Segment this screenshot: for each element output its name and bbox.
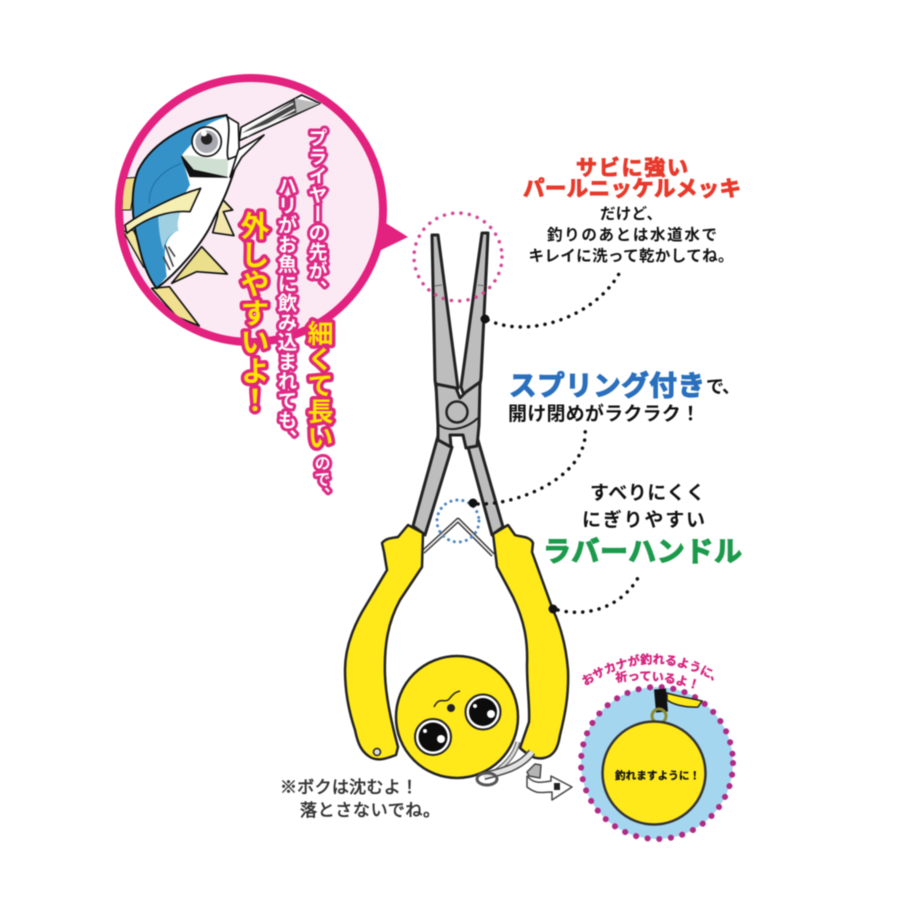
emphasis: thin and long: 細くて長い [304, 320, 334, 450]
left arm [413, 436, 452, 535]
handle heading: ラバーハンドル [543, 536, 742, 567]
note: wash and dry after fishing [528, 205, 734, 265]
emphasis: easy to remove: 外しやすいよ！ [236, 211, 270, 414]
jaw tip lines [434, 285, 485, 286]
bubble circle and pointer [119, 78, 408, 342]
caption line 1: おサカナが釣れるように、 [582, 652, 714, 686]
back message: 釣れますように！ [615, 769, 700, 782]
line 1: プライヤーの先が、 [306, 128, 327, 299]
nose [448, 704, 454, 712]
right eye [466, 694, 500, 730]
handle note 1: すべりにくく [590, 482, 705, 504]
blue back [133, 115, 227, 288]
note line 3: キレイに洗って乾かしてね。 [528, 246, 734, 265]
note: mascot sinks [280, 778, 440, 820]
panel: fish speech bubble [119, 78, 408, 342]
head patch [182, 155, 228, 177]
fish eye [192, 127, 221, 156]
note line 2: 釣りのあとは水道水で [547, 225, 717, 244]
mouth [182, 156, 227, 177]
cord and charm [652, 689, 702, 723]
handle note 2: にぎりやすい [582, 508, 705, 531]
line 2: ハリがお魚に飲み込まれても、 [274, 176, 297, 449]
right jaw [461, 233, 488, 398]
caption line 2: 祈っているよ！ [614, 670, 697, 690]
lanyard hole [374, 748, 380, 756]
callout: rubber handle [543, 482, 742, 567]
leader: spring [468, 428, 585, 508]
right arm [468, 440, 503, 535]
body outline [133, 115, 238, 288]
spring [423, 520, 493, 555]
mascot face [396, 656, 518, 778]
lighter flank [158, 212, 180, 250]
left handle [345, 525, 423, 759]
plier tips in fish mouth [239, 95, 320, 141]
panel: mascot back view [581, 687, 733, 839]
pliers illustration [345, 233, 568, 759]
body stripe [149, 163, 182, 203]
yellow back of mascot [602, 722, 706, 824]
key ring [477, 742, 532, 785]
heading line 1: サビに強い [576, 157, 688, 180]
caption: praying for a catch [582, 652, 714, 690]
head [396, 656, 518, 778]
sink line 2: 落とさないでね。 [300, 801, 440, 820]
vertical caption: plier tip is thin and long [236, 128, 334, 503]
left eye [415, 719, 451, 755]
heading line 2: パールニッケルメッキ [523, 177, 741, 201]
note line 1: だけど、 [600, 205, 662, 223]
spring heading: スプリング付き [509, 370, 705, 401]
pivot body [436, 382, 480, 448]
heading: rust resistant pearl nickel plating [523, 157, 741, 201]
blue circle with dotted border [581, 687, 733, 839]
right handle [493, 525, 568, 758]
illustration: fish hooked with pliers [122, 95, 320, 326]
spring note: 開け閉めがラクラク！ [508, 402, 700, 425]
infographic canvas [114, 73, 742, 843]
fish body base [162, 117, 235, 282]
jaw [227, 117, 239, 159]
highlight circle: plier tip [414, 213, 502, 301]
tail and rear fins [122, 177, 234, 326]
spring suffix: で、 [706, 377, 740, 397]
line 1 end: ので、 [312, 455, 330, 503]
brow [434, 691, 460, 707]
leader: rubber handle [548, 574, 640, 614]
callout: spring [508, 370, 740, 425]
leader: nickel plating [480, 268, 622, 327]
highlight circle: spring [437, 500, 479, 542]
belly scales [163, 245, 175, 270]
sink line 1: ※ボクは沈むよ！ [280, 778, 418, 797]
pectoral fin [125, 188, 201, 233]
icon: flip arrow [527, 764, 572, 800]
left jaw [432, 235, 458, 400]
